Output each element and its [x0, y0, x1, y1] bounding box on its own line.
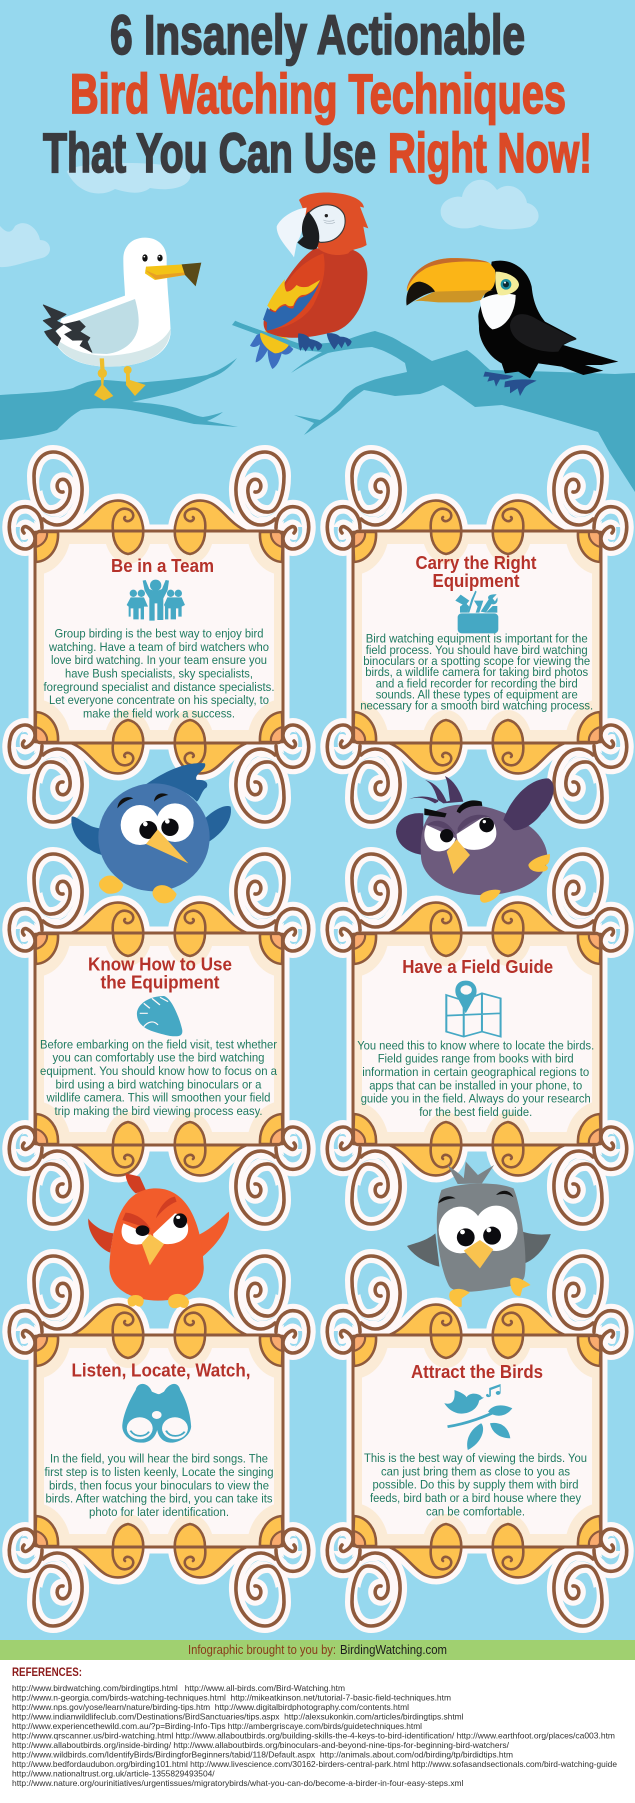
credit text: Infographic brought to you by: — [188, 1642, 336, 1657]
credit text — [188, 1642, 447, 1657]
references list: http://www.indianwildlifeclub.com/Destinations/BirdSanctuaries/tips.aspx http://alexsukonkin.com/articles/birdingtips.shtml — [12, 1712, 464, 1722]
references list: http://www.qrscanner.us/bird-watching.html http://www.allaboutbirds.org/building-skills-the-4-keys-to-bird-identification/ http://www.earthfoot.org/places/ca003.htm — [12, 1731, 615, 1741]
title: That You Can Use — [43, 121, 376, 184]
title — [43, 3, 592, 184]
ornate frame — [0, 452, 319, 822]
heading: Listen, Locate, Watch, — [72, 1360, 250, 1381]
credit text: BirdingWatching.com — [340, 1642, 447, 1657]
references list: http://www.n-georgia.com/birds-watching-techniques.html http://mikeatkinson.net/tutorial-7-basic-field-techniques.htm — [12, 1692, 451, 1702]
panel: Listen, Locate, Watch — [0, 1256, 319, 1626]
icon: team — [127, 580, 185, 621]
heading — [416, 552, 536, 591]
icon: glove — [137, 996, 182, 1036]
bird: orange cartoon — [88, 1173, 229, 1308]
references list: http://www.bedfordaudubon.org/birding101.html http://www.livescience.com/30162-birders-central-park.html http://www.sofasandsectionals.com/bird-watching-guide — [12, 1759, 617, 1769]
ornate frame — [317, 1256, 635, 1626]
body text: can just bring them as close to you as — [381, 1464, 570, 1478]
references list: http://www.birdwatching.com/birdingtips.html http://www.all-birds.com/Bird-Watching.htm — [12, 1683, 345, 1693]
ornate frame — [317, 854, 635, 1224]
icon: map with pin — [446, 981, 501, 1037]
body text: birds, then focus your binoculars to view the — [49, 1478, 269, 1492]
body text: Let everyone concentrate on his specialty, to — [49, 693, 269, 707]
body text: Bird watching equipment is important for the — [366, 632, 588, 646]
body text: guide you in the field. Always do your research — [361, 1092, 591, 1106]
heading: Carry the Right — [416, 552, 536, 573]
body text: and a field recorder for recording the bird — [376, 676, 578, 690]
body text — [44, 627, 274, 720]
body text: In the field, you will hear the bird songs. The — [50, 1452, 268, 1466]
body text: Group birding is the best way to enjoy bird — [54, 627, 264, 641]
references list: http://www.nps.gov/yose/learn/nature/birding-tips.htm http://www.digitalbirdphotography.com/contents.html — [12, 1702, 409, 1712]
body text: can be comfortable. — [426, 1504, 525, 1518]
clouds — [0, 163, 539, 267]
bird: grey cartoon — [407, 1162, 551, 1307]
body text: possible. Do this by supply them with bird — [372, 1478, 579, 1492]
body text — [364, 1451, 587, 1518]
ornate frame — [317, 452, 635, 822]
heading — [88, 954, 232, 993]
body text — [360, 632, 593, 713]
body text: wildlife camera. This will smoothen your field — [46, 1091, 271, 1105]
heading: Attract the Birds — [411, 1361, 543, 1382]
heading: the Equipment — [100, 972, 220, 993]
references heading: REFERENCES: — [12, 1667, 82, 1679]
body text: birds, a wildlife camera for taking bird photos — [365, 665, 588, 679]
icon: binoculars — [122, 1384, 191, 1443]
body text: necessary for a smooth bird watching process. — [360, 699, 593, 713]
references list: http://www.nature.org/ourinitiatives/urgentissues/migratorybirds/what-you-can-do/become-a-birder-in-four-easy-steps.xml — [12, 1778, 464, 1788]
bird: blue cartoon — [71, 763, 231, 903]
body text: first step is to listen keenly, Locate the singing — [44, 1465, 274, 1479]
bird: parrot — [235, 192, 368, 369]
body text: bird using a bird watching binoculars or a — [56, 1077, 262, 1091]
references list: http://www.nationaltrust.org.uk/article-1355829493504/ — [12, 1769, 215, 1779]
body text: you can comfortably use the bird watching — [52, 1051, 265, 1065]
references list: http://www.allaboutbirds.org/inside-birding/ http://www.allaboutbirds.org/binoculars-and-beyond-nine-tips-for-beginning-bird-watchers/ — [12, 1740, 510, 1750]
body text: Before embarking on the field visit, test whether — [40, 1037, 277, 1051]
body text: field process. You should have bird watching — [366, 643, 588, 657]
body text: for the best field guide. — [419, 1105, 532, 1119]
body text: This is the best way of viewing the birds. You — [364, 1451, 587, 1465]
heading: Equipment — [432, 570, 520, 591]
body text: sounds. All these types of equipment are — [376, 688, 578, 702]
body text: have Bush specialists, sky specialists, — [65, 666, 253, 680]
heading: Have a Field Guide — [402, 956, 553, 977]
body text: information in certain geographical regions to — [362, 1065, 589, 1079]
white references panel — [0, 1660, 635, 1803]
body text: You need this to know where to locate the birds. — [357, 1038, 594, 1052]
body text: make the field work a success. — [83, 706, 235, 720]
icon: bird on a branch with music note — [444, 1384, 512, 1450]
ornate frame — [0, 854, 319, 1224]
bird: seagull — [43, 238, 201, 401]
body text — [44, 1452, 274, 1519]
heading: Be in a Team — [111, 555, 214, 576]
body text: feeds, bird bath or a bird house where they — [370, 1491, 582, 1505]
footer band — [0, 1640, 635, 1660]
ornate frame — [0, 1256, 319, 1626]
tree branches — [0, 321, 635, 492]
panel: Attract the Birds — [317, 1256, 635, 1626]
bird: toucan — [406, 258, 618, 396]
panel: Carry the Right Equipment — [317, 452, 635, 822]
references list — [12, 1683, 617, 1788]
references list: http://www.experiencethewild.com.au/?p=Birding-Info-Tips http://ambergriscaye.com/birds/guidetechniques.html — [12, 1721, 422, 1731]
body text: birds. After watching the bird, you can take its — [46, 1492, 272, 1506]
panel: Be in a Team — [0, 452, 319, 822]
body text: Field guides range from books with bird — [378, 1052, 574, 1066]
body text: photo for later identification. — [89, 1505, 229, 1519]
body text: watching. Have a team of bird watchers who — [48, 640, 269, 654]
references list: http://www.wildbirds.com/IdentifyBirds/BirdingforBeginners/tabid/118/Default.aspx http://animals.about.com/od/birding/tp/birdidtips.htm — [12, 1750, 513, 1760]
heading: Know How to Use — [88, 954, 232, 975]
body text: binoculars or a spotting scope for viewing the — [363, 654, 590, 668]
panel: Know How to Use the Equipment — [0, 854, 319, 1224]
body text — [357, 1038, 594, 1119]
body text: foreground specialist and distance specialists. — [44, 680, 274, 694]
body text: love bird watching. In your team ensure you — [51, 653, 267, 667]
icon: toolbox — [455, 591, 498, 633]
body text: trip making the bird viewing process easy. — [54, 1104, 262, 1118]
panel: Have a Field Guide — [317, 854, 635, 1224]
body text — [40, 1037, 277, 1118]
bird: purple cartoon — [396, 776, 554, 903]
body text: equipment. You should know how to focus on a — [40, 1064, 277, 1078]
body text: apps that can be installed in your phone, to — [369, 1078, 582, 1092]
